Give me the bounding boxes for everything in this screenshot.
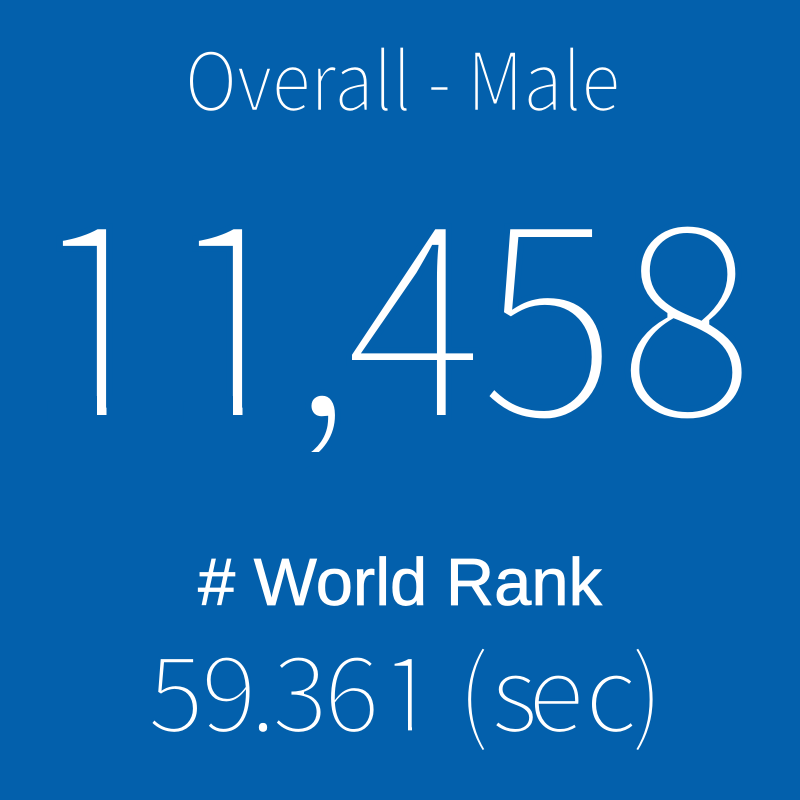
heading: category: Overall - Male: [185, 18, 620, 134]
main value: rank number: 11,458: [26, 113, 757, 494]
label: world rank: # World Rank: [198, 546, 603, 620]
secondary value: time in seconds: 59.361(sec): [148, 610, 664, 762]
